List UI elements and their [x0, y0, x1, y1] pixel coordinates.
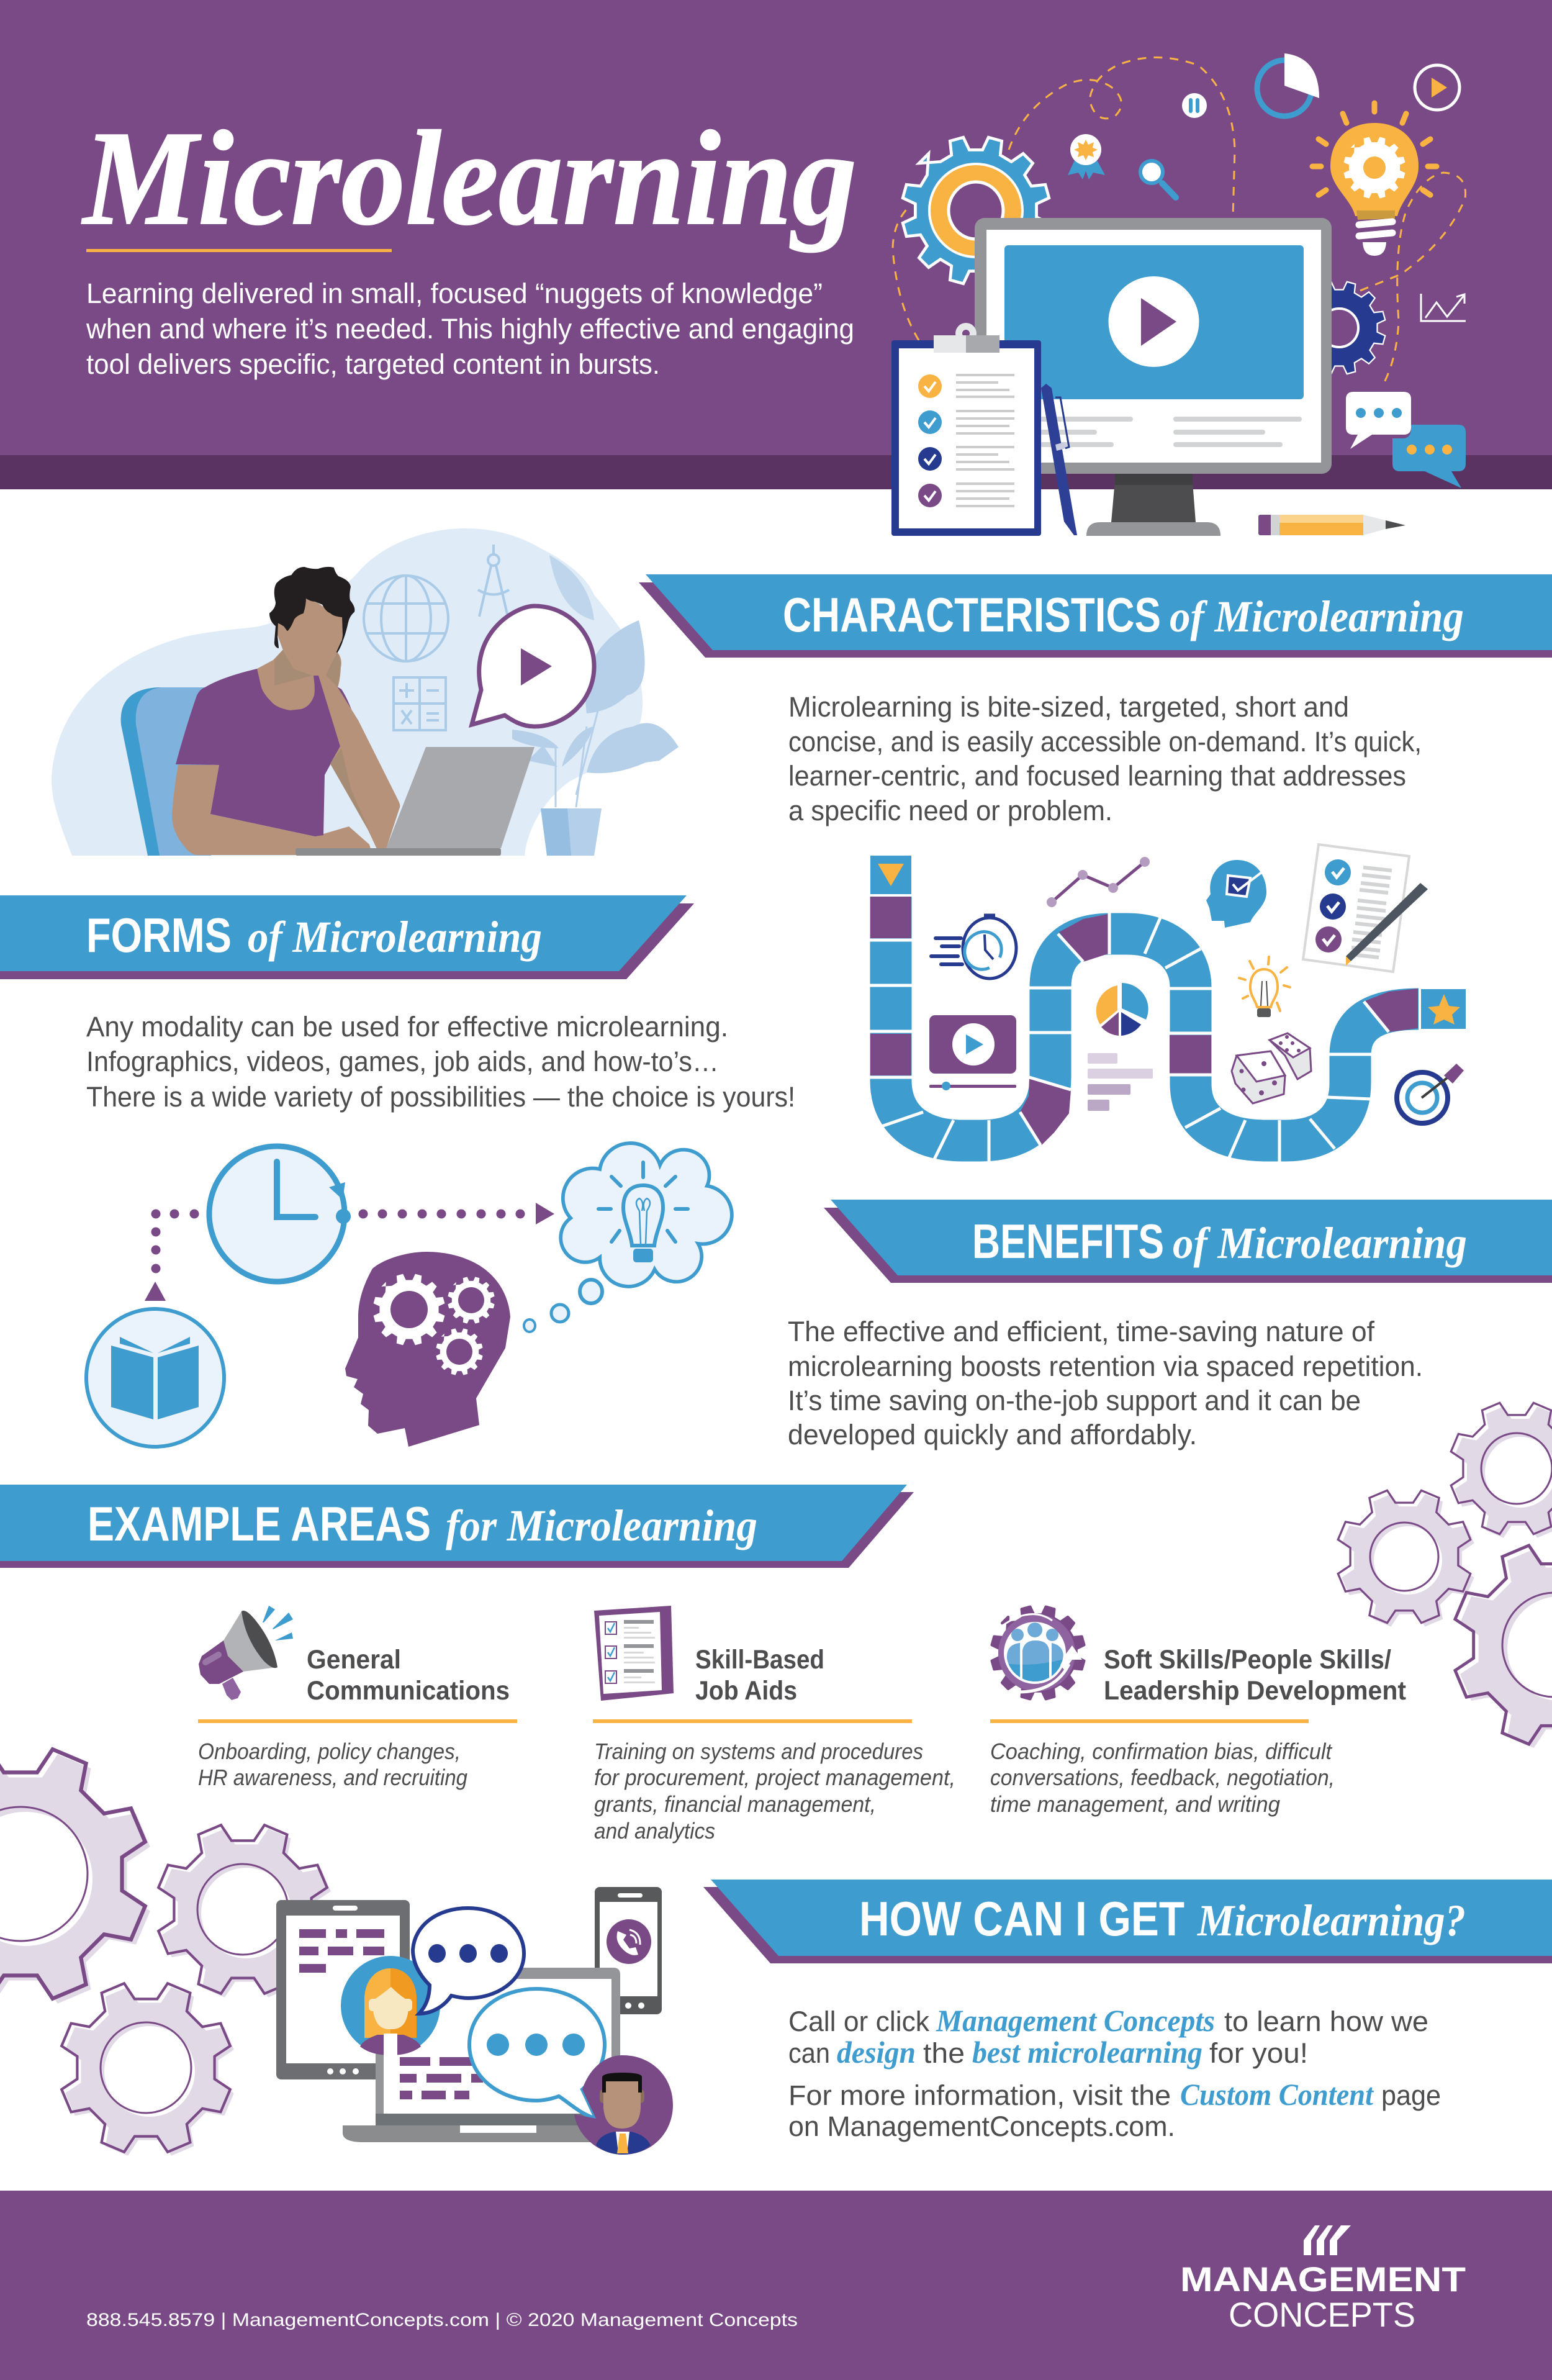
- text: forms description: [86, 1011, 795, 1113]
- icon: checklist: [594, 1606, 674, 1701]
- column: skill-based job aids: Training on systems and procedures: [594, 1739, 923, 1764]
- banner: benefits: BENEFITS: [972, 1214, 1164, 1269]
- icon: monitor with play button: [975, 218, 1332, 536]
- icon: open book: [86, 1309, 224, 1447]
- text: forms description: There is a wide variety of possibilities — the choice is yours!: [86, 1081, 795, 1113]
- banner: how can I get: [703, 1880, 1552, 1963]
- banner: how can I get: HOW CAN I GET: [859, 1891, 1184, 1946]
- icon: magnifier: [1140, 161, 1176, 197]
- icon: bar chart: [1088, 1053, 1153, 1111]
- banner: example areas: for Microlearning: [446, 1501, 757, 1550]
- column: skill-based job aids: grants, financial management,: [594, 1791, 876, 1817]
- banner: benefits: [824, 1200, 1552, 1283]
- column: soft skills: time management, and writing: [990, 1791, 1280, 1817]
- chart: board game track: [869, 856, 1466, 1162]
- column: general communications: Communications: [307, 1676, 510, 1706]
- column: soft skills: Soft Skills/People Skills/: [1104, 1645, 1391, 1675]
- icon: pause button: [1182, 93, 1207, 118]
- icon: chat bubbles: [1346, 392, 1466, 488]
- text: benefits description: The effective and efficient, time-saving nature of: [788, 1316, 1374, 1347]
- text: how to get microlearning: for you!: [1209, 2037, 1308, 2069]
- text: characteristics description: a specific need or problem.: [788, 795, 1112, 826]
- logo: Management Concepts: [1180, 2225, 1466, 2334]
- text: benefits description: [788, 1316, 1423, 1450]
- intro text: Learning delivered in small, focused “nuggets of knowledge”: [86, 278, 823, 309]
- banner: benefits: of Microlearning: [1173, 1218, 1467, 1268]
- text: how to get microlearning: page: [1381, 2079, 1441, 2111]
- banner: example areas: [0, 1485, 914, 1568]
- text: characteristics description: learner-centric, and focused learning that addresses: [788, 760, 1406, 792]
- icon: thought cloud with lightbulb: [561, 1143, 732, 1287]
- footer contact line: 888.545.8579 | ManagementConcepts.com | © 2020 Management Concepts: [86, 2310, 798, 2330]
- intro text: tool delivers specific, targeted content in bursts.: [86, 348, 660, 380]
- icon: head with gears: [345, 1252, 510, 1447]
- text: characteristics description: [788, 691, 1422, 826]
- icon: award ribbon: [1068, 134, 1105, 179]
- text: how to get microlearning: to learn how we: [1224, 2006, 1428, 2037]
- icon: blue speech bubble: [469, 1989, 605, 2119]
- icon: video player: [929, 1015, 1016, 1090]
- intro text: when and where it’s needed. This highly effective and engaging: [86, 313, 854, 345]
- icon: head with checkbox: [1206, 860, 1266, 928]
- text: benefits description: It’s time saving on-the-job support and it can be: [788, 1385, 1361, 1416]
- column: soft skills: Leadership Development: [1104, 1676, 1406, 1706]
- title: Microlearning: [81, 104, 857, 253]
- text: how to get microlearning: Call or click: [788, 2006, 929, 2037]
- icon: lightbulb with gear: [1312, 103, 1437, 256]
- banner: how can I get: Microlearning?: [1197, 1896, 1466, 1945]
- banner: forms: [0, 895, 694, 979]
- icon: pen: [1041, 384, 1077, 535]
- column: general communications: General: [307, 1645, 401, 1675]
- intro text: [86, 278, 854, 380]
- text: how to get microlearning: [788, 2003, 1441, 2142]
- column: soft skills: Coaching, confirmation bias, difficult: [990, 1739, 1333, 1764]
- icon: play circle: [1415, 65, 1460, 110]
- dashed connector paths: [893, 57, 1466, 387]
- icon: dice: [1232, 1033, 1311, 1103]
- flow arrows: dotted path: [145, 1203, 554, 1301]
- column: skill-based job aids: and analytics: [594, 1818, 715, 1844]
- text: how to get microlearning: design: [837, 2035, 916, 2070]
- column: skill-based job aids: Job Aids: [695, 1676, 797, 1706]
- icon: laptop: [343, 1968, 621, 2142]
- icon: blue gear: [903, 137, 1049, 284]
- text: benefits description: developed quickly and affordably.: [788, 1419, 1197, 1450]
- icon: navy speech bubble: [413, 1908, 524, 2014]
- text: how to get microlearning: the: [923, 2037, 965, 2069]
- banner: characteristics: of Microlearning: [1170, 592, 1464, 641]
- text: forms description: Any modality can be used for effective microlearning.: [86, 1011, 728, 1043]
- flow diagram: book to clock to idea: [86, 1143, 732, 1447]
- column: skill-based job aids: [593, 1606, 955, 1844]
- text: how to get microlearning: For more information, visit the: [788, 2079, 1171, 2111]
- banner: characteristics: [639, 574, 1552, 658]
- column: general communications: HR awareness, and recruiting: [198, 1765, 467, 1790]
- text: how to get microlearning: Management Concepts: [936, 2003, 1215, 2038]
- text: how to get microlearning: best microlearning: [972, 2035, 1202, 2070]
- text: characteristics description: concise, and is easily accessible on-demand. It’s quick,: [788, 726, 1422, 758]
- icon: tablet: [276, 1900, 410, 2079]
- icon: pie chart: [1096, 983, 1148, 1036]
- icon: phone: [595, 1887, 662, 2014]
- decorative gears: upper right: [1338, 1403, 1552, 1748]
- icon: megaphone: [199, 1606, 293, 1700]
- decorative gears: lower left: [0, 1749, 331, 2156]
- text: characteristics description: Microlearning is bite-sized, targeted, short and: [788, 691, 1349, 723]
- text: how to get microlearning: Custom Content: [1180, 2077, 1374, 2112]
- panel: header background: [0, 0, 1552, 489]
- icon: small lightbulb: [1239, 957, 1290, 1017]
- logo: Management Concepts: CONCEPTS: [1229, 2295, 1415, 2334]
- icon: people in gear: [992, 1607, 1084, 1699]
- icon: thought bubbles: [524, 1280, 602, 1332]
- icon: pencil: [1258, 515, 1405, 535]
- text: benefits description: microlearning boosts retention via spaced repetition.: [788, 1351, 1423, 1382]
- icon: navy gear: [1293, 282, 1385, 374]
- column: general communications: [198, 1606, 517, 1790]
- icon: line chart: [1047, 857, 1150, 907]
- illustration: learner at laptop: [52, 528, 679, 856]
- icon: clipboard checklist: [891, 323, 1041, 536]
- icon: woman avatar: [341, 1956, 440, 2055]
- column: skill-based job aids: for procurement, project management,: [594, 1765, 955, 1790]
- column: general communications: Onboarding, policy changes,: [198, 1739, 461, 1764]
- banner: forms: of Microlearning: [248, 912, 542, 962]
- banner: characteristics: CHARACTERISTICS: [783, 587, 1161, 642]
- icon: stopwatch: [931, 915, 1016, 979]
- text: forms description: Infographics, videos, games, job aids, and how-to’s…: [86, 1046, 719, 1077]
- icon: clock: [209, 1146, 351, 1282]
- banner: forms: FORMS: [86, 908, 232, 962]
- icon: man avatar: [574, 2055, 673, 2155]
- title underline: [86, 249, 392, 252]
- illustration: devices and chat: [276, 1887, 673, 2155]
- column: skill-based job aids: Skill-Based: [695, 1645, 824, 1675]
- column: soft skills: conversations, feedback, negotiation,: [990, 1765, 1335, 1790]
- icon: target with arrow: [1397, 1064, 1464, 1123]
- icon: trend chart: [1421, 294, 1466, 321]
- column: soft skills: [990, 1607, 1406, 1817]
- text: how to get microlearning: on ManagementConcepts.com.: [788, 2111, 1175, 2142]
- icon: checklist document with pen: [1303, 844, 1428, 972]
- text: how to get microlearning: can: [788, 2037, 830, 2069]
- icon: pie ring: [1257, 53, 1319, 116]
- banner: example areas: EXAMPLE AREAS: [88, 1496, 431, 1551]
- panel: footer: [0, 2191, 1552, 2380]
- logo: Management Concepts: MANAGEMENT: [1180, 2260, 1466, 2299]
